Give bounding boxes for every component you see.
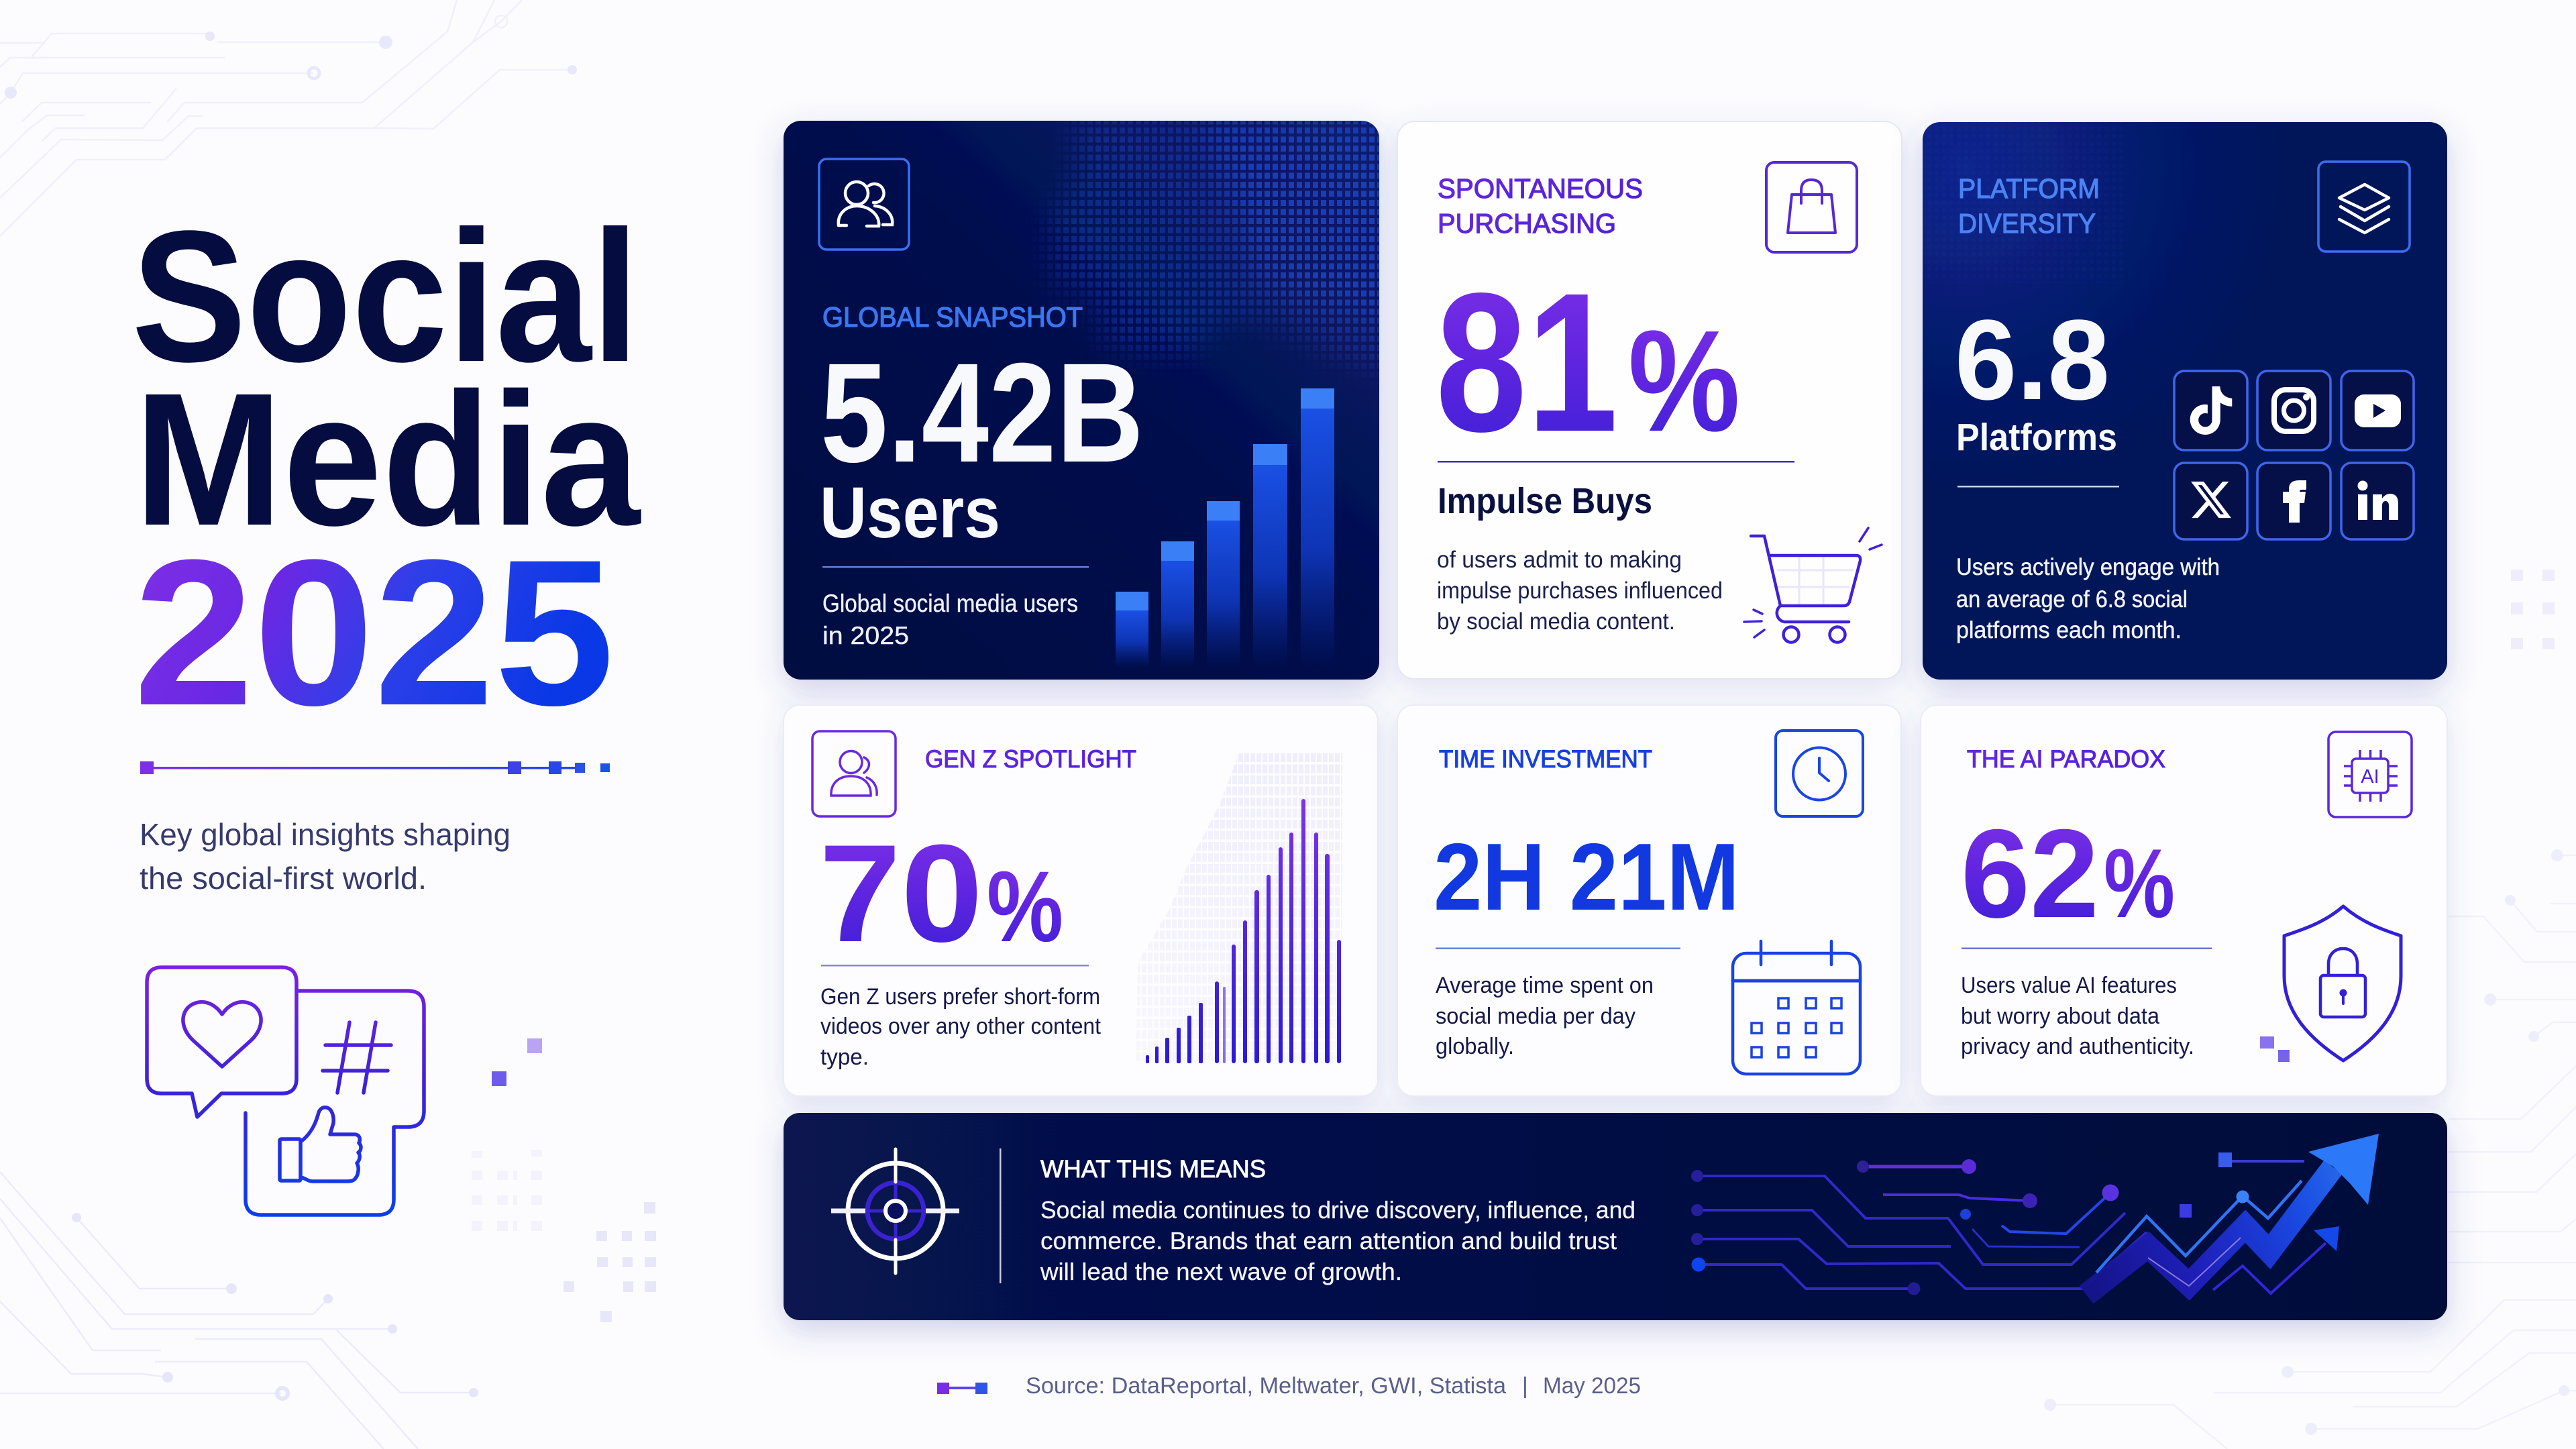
dotted world map bbox=[1039, 121, 1379, 378]
accent squares bbox=[2260, 1036, 2290, 1062]
panel: time investment bbox=[1397, 705, 1901, 1096]
description: commerce. Brands that earn attention and build trust bbox=[1040, 1227, 1617, 1254]
panel: the AI paradox bbox=[1921, 705, 2447, 1096]
source line bbox=[937, 1373, 1641, 1399]
icon: target bbox=[831, 1149, 959, 1273]
card background bbox=[1921, 705, 2447, 1096]
heading: DIVERSITY bbox=[1958, 208, 2096, 239]
card background bbox=[1397, 705, 1901, 1096]
description: but worry about data bbox=[1961, 1004, 2159, 1029]
heading: PLATFORM bbox=[1958, 173, 2100, 204]
unit: Users bbox=[820, 472, 1000, 553]
percent sign: % bbox=[2104, 828, 2175, 938]
card background bbox=[1397, 121, 1902, 679]
vertical divider bbox=[1000, 1148, 1001, 1283]
card background bbox=[784, 121, 1379, 680]
big number: 6.8 bbox=[1955, 297, 2110, 424]
divider bbox=[1436, 947, 1680, 949]
panel: global snapshot bbox=[784, 121, 1382, 680]
title: Media bbox=[134, 354, 641, 565]
heading: TIME INVESTMENT bbox=[1439, 745, 1652, 773]
description bbox=[1961, 973, 2194, 1059]
background circuit pattern: bottom left bbox=[0, 1172, 478, 1449]
icon: shopping bag bbox=[1766, 162, 1857, 252]
heading: SPONTANEOUS bbox=[1438, 173, 1643, 204]
description: videos over any other content bbox=[820, 1014, 1102, 1039]
subtitle bbox=[140, 817, 511, 896]
description bbox=[820, 984, 1102, 1070]
icon: Instagram bbox=[2257, 371, 2330, 450]
icon: source connector bbox=[937, 1383, 987, 1394]
subheading: Impulse Buys bbox=[1438, 481, 1652, 521]
icon: LinkedIn bbox=[2341, 463, 2414, 539]
subtitle: the social-first world. bbox=[140, 861, 427, 896]
description: Users value AI features bbox=[1961, 973, 2177, 998]
panel: gen z spotlight bbox=[784, 705, 1378, 1096]
description: globally. bbox=[1436, 1034, 1514, 1059]
description: type. bbox=[820, 1044, 869, 1070]
big number: 70 bbox=[819, 816, 983, 971]
icon: YouTube bbox=[2341, 371, 2414, 450]
divider bbox=[822, 566, 1089, 568]
description: Average time spent on bbox=[1436, 973, 1654, 998]
heading: WHAT THIS MEANS bbox=[1040, 1155, 1266, 1183]
background circuit pattern: right side and bottom bbox=[2044, 849, 2576, 1449]
description bbox=[822, 590, 1078, 649]
panel: platform diversity bbox=[1923, 122, 2447, 680]
panel: spontaneous purchasing bbox=[1397, 121, 1902, 679]
card background bbox=[784, 705, 1378, 1096]
circuit traces bbox=[1691, 1159, 2147, 1295]
icon: TikTok bbox=[2174, 371, 2247, 450]
icon: social bubbles with heart, hashtag and thumbs up bbox=[147, 967, 424, 1215]
social icon grid bbox=[2174, 371, 2414, 539]
description: Global social media users bbox=[822, 590, 1078, 617]
divider bbox=[821, 965, 1089, 966]
decorative squares: left column bbox=[472, 1038, 656, 1322]
description: will lead the next wave of growth. bbox=[1040, 1258, 1402, 1285]
description: platforms each month. bbox=[1956, 617, 2182, 643]
description bbox=[1436, 973, 1654, 1059]
heading: PURCHASING bbox=[1438, 208, 1616, 239]
heading bbox=[1438, 173, 1643, 239]
panel: what this means bbox=[784, 1113, 2447, 1320]
icon: layers bbox=[2318, 162, 2410, 252]
source text: May 2025 bbox=[1543, 1373, 1641, 1399]
big number: 62 bbox=[1961, 803, 2099, 944]
heading: THE AI PARADOX bbox=[1967, 745, 2165, 773]
card background bbox=[1923, 122, 2447, 680]
title: 2025 bbox=[133, 516, 614, 749]
decorative squares: right margin bbox=[2511, 570, 2555, 649]
icon: person bbox=[812, 731, 896, 816]
description bbox=[1437, 547, 1723, 635]
big number: 81 bbox=[1436, 252, 1618, 473]
icon: AI chip bbox=[2328, 732, 2412, 817]
banner background bbox=[784, 1113, 2447, 1320]
divider bbox=[1962, 947, 2212, 949]
percent sign: % bbox=[1628, 300, 1740, 462]
description: Social media continues to drive discovery, influence, and bbox=[1040, 1196, 1635, 1224]
title bbox=[131, 192, 641, 749]
icon: X bbox=[2174, 463, 2247, 539]
icon: shopping cart bbox=[1744, 528, 1882, 643]
title: Social bbox=[131, 192, 639, 401]
icon: calendar bbox=[1733, 941, 1860, 1074]
icon: shield with lock bbox=[2284, 906, 2401, 1061]
background circuit pattern: top left bbox=[0, 0, 577, 236]
icon: clock bbox=[1776, 731, 1863, 816]
description: social media per day bbox=[1436, 1004, 1635, 1029]
description: an average of 6.8 social bbox=[1956, 586, 2188, 612]
subtitle: Key global insights shaping bbox=[140, 817, 511, 852]
source text: | bbox=[1522, 1373, 1528, 1399]
bar chart bbox=[1116, 388, 1334, 667]
description bbox=[1040, 1196, 1635, 1285]
source text: Source: DataReportal, Meltwater, GWI, Statista bbox=[1026, 1373, 1506, 1399]
description: Gen Z users prefer short-form bbox=[820, 984, 1100, 1010]
divider bbox=[1438, 461, 1794, 463]
icon: users bbox=[819, 159, 909, 250]
description: Users actively engage with bbox=[1956, 554, 2220, 580]
title divider with squares bbox=[140, 761, 610, 774]
description: impulse purchases influenced bbox=[1437, 578, 1723, 604]
description bbox=[1956, 554, 2220, 643]
icon: AI chip: AI bbox=[2361, 766, 2379, 788]
dotted glow bbox=[1923, 122, 2124, 283]
unit: Platforms bbox=[1956, 416, 2117, 459]
icon: Facebook bbox=[2257, 463, 2330, 539]
heading bbox=[1958, 173, 2100, 239]
label: GLOBAL SNAPSHOT bbox=[822, 301, 1083, 333]
percent sign: % bbox=[987, 850, 1063, 963]
description: in 2025 bbox=[822, 622, 909, 649]
chart backdrop: dotted field bbox=[1138, 753, 1342, 994]
description: by social media content. bbox=[1437, 608, 1675, 635]
spike bar chart bbox=[1146, 799, 1341, 1063]
heading: GEN Z SPOTLIGHT bbox=[925, 745, 1136, 773]
divider bbox=[1957, 486, 2119, 487]
big number: 5.42B bbox=[820, 333, 1144, 492]
description: privacy and authenticity. bbox=[1961, 1034, 2194, 1059]
big number: 2H 21M bbox=[1434, 824, 1739, 930]
growth arrow bbox=[2086, 1134, 2379, 1295]
description: of users admit to making bbox=[1437, 547, 1682, 573]
